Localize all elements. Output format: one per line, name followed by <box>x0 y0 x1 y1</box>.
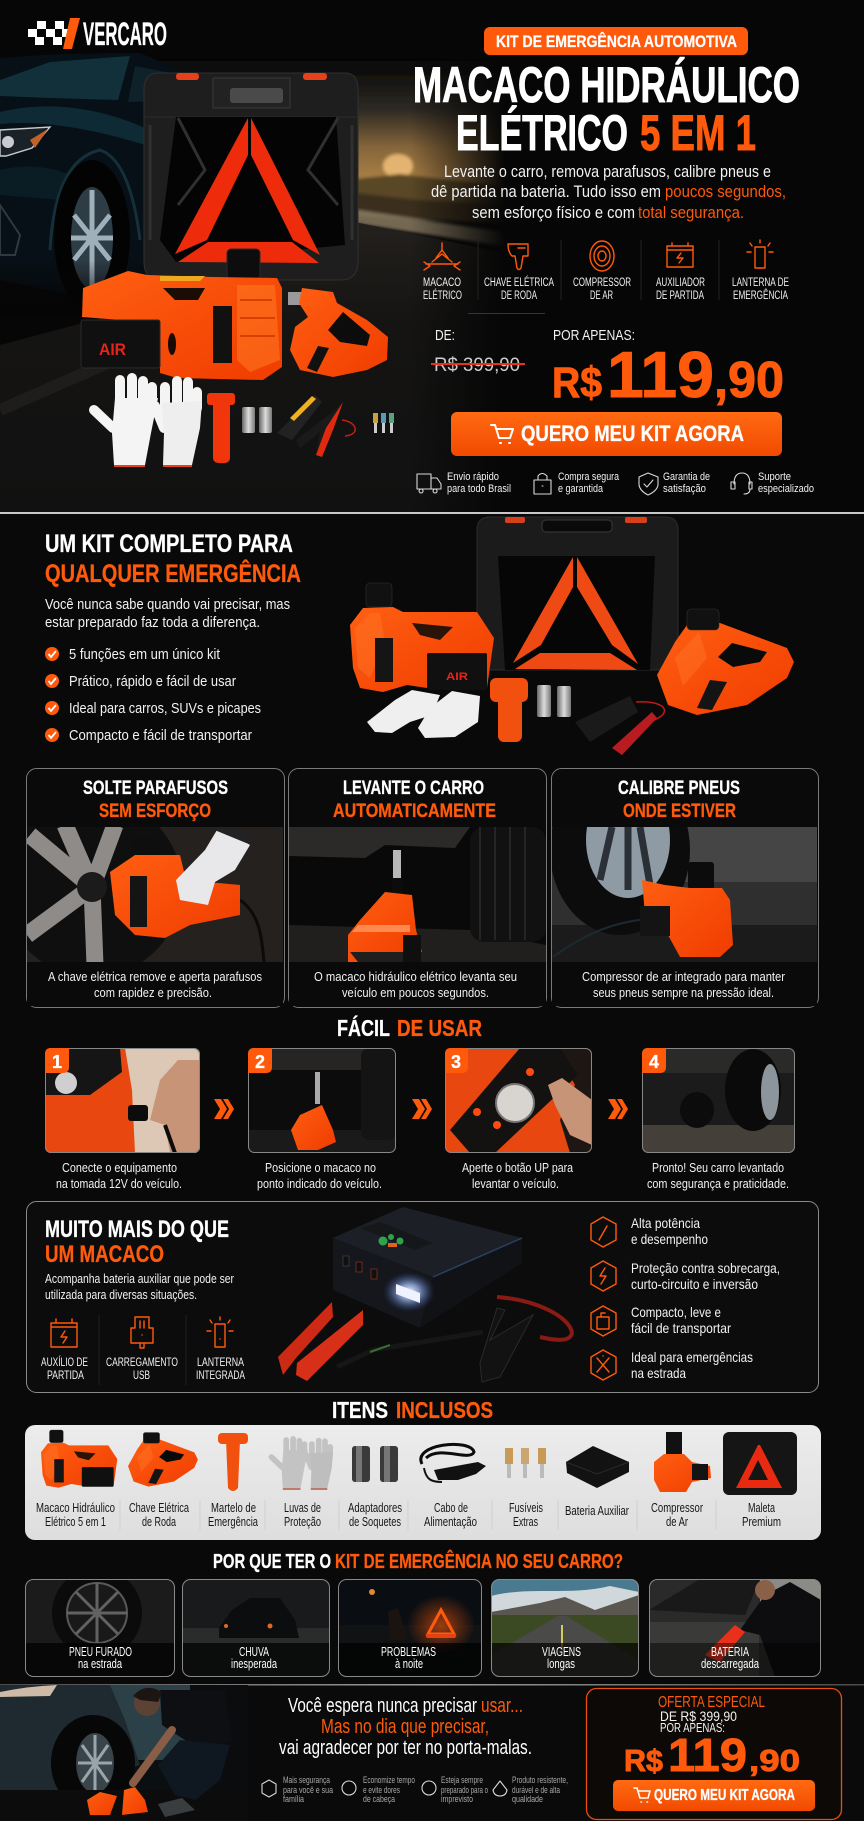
label: chave elétrica: CHAVE ELÉTRICA <box>484 276 554 289</box>
kit description: Você nunca sabe quando vai precisar, mas <box>45 597 290 613</box>
text: estrada <box>631 1349 753 1381</box>
kit jack <box>350 583 494 692</box>
section heading: por que <box>213 1549 623 1573</box>
label: auxiliador <box>656 277 705 302</box>
label: usb: USB <box>133 1370 150 1382</box>
label: partida: PARTIDA <box>47 1370 84 1382</box>
card title: SOLTE PARAFUSOS <box>83 778 228 799</box>
icon: lock <box>534 474 551 494</box>
badge <box>484 27 748 55</box>
price block <box>431 327 784 411</box>
hero panel <box>0 53 498 510</box>
step badge <box>642 1048 666 1073</box>
card photo <box>289 827 546 962</box>
label: macaco elétrico: ELÉTRICO <box>423 289 462 302</box>
reason card: bateria: descarregada <box>701 1657 759 1671</box>
step badge: 2 <box>255 1052 265 1072</box>
icon: proteção <box>591 1261 616 1291</box>
text: compra <box>558 471 620 495</box>
label: lanterna <box>196 1357 245 1382</box>
item: adaptadores: Adaptadores <box>348 1501 402 1515</box>
label: lanterna <box>732 277 789 302</box>
text: compra: Compra segura <box>558 471 620 483</box>
footer message: Mas no dia que precisar, <box>321 1716 489 1738</box>
section heading: por que: POR QUE TER O <box>213 1551 331 1573</box>
item: adaptadores: de Soquetes <box>349 1515 401 1529</box>
text: compacto <box>631 1304 731 1336</box>
step 1 <box>45 1048 200 1191</box>
icon: headset <box>731 473 752 494</box>
text: preparado: preparado para o <box>441 1785 488 1796</box>
card title <box>333 778 496 822</box>
item: martelo: Martelo de <box>211 1501 256 1515</box>
arrow <box>214 1099 234 1119</box>
footer benefits <box>262 1775 568 1805</box>
text: tempo: e evite dores <box>363 1785 400 1796</box>
offer box: OFERTA ESPECIAL <box>658 1694 765 1711</box>
step badge <box>248 1048 272 1073</box>
item: compressor: Compressor <box>651 1501 703 1515</box>
hero carrying case <box>144 73 358 280</box>
section heading: kit completo: UM KIT COMPLETO PARA <box>45 530 293 558</box>
item: chave: Chave Elétrica <box>129 1501 189 1515</box>
card caption <box>48 969 262 1000</box>
reason card: viagens: VIAGENS <box>542 1645 581 1659</box>
step caption: Posicione o macaco no <box>265 1160 376 1175</box>
text: suporte: Suporte <box>758 471 791 483</box>
item: maleta <box>723 1432 797 1529</box>
card photo <box>552 827 817 962</box>
hero clamps <box>277 395 355 457</box>
card caption <box>314 969 517 1000</box>
footer message: vai agradecer por ter no porta-malas. <box>279 1737 532 1759</box>
hero description: sem esforço físico e com <box>472 204 635 222</box>
item: maleta: Maleta <box>748 1501 775 1515</box>
label: compressor: DE AR <box>590 290 613 302</box>
section heading: kit completo: QUALQUER EMERGÊNCIA <box>45 558 301 588</box>
step photo <box>45 1048 200 1153</box>
reason card: problemas: PROBLEMAS <box>381 1645 436 1659</box>
section heading: kit completo <box>45 530 301 588</box>
step caption <box>647 1160 789 1191</box>
hero gloves <box>94 378 202 466</box>
reason card: chuva: inesperada <box>231 1657 277 1671</box>
hero description: total segurança. <box>638 204 744 222</box>
footer band <box>0 1684 864 1821</box>
text: tempo: Economize tempo <box>363 1775 415 1786</box>
label: lanterna: LANTERNA <box>197 1357 244 1369</box>
section heading: itens inclusos: INCLUSOS <box>396 1397 493 1423</box>
section heading: itens inclusos <box>332 1397 493 1423</box>
text: segurança: família <box>283 1794 305 1805</box>
icon: usb <box>131 1317 153 1348</box>
card caption: Compressor de ar integrado para manter <box>582 969 786 984</box>
reason card: viagens: longas <box>547 1657 575 1671</box>
text: envio: Envio rápido <box>447 471 499 483</box>
kit description <box>45 597 290 631</box>
panel: muito mais <box>26 1202 818 1392</box>
reason card: chuva <box>182 1579 330 1677</box>
section heading: itens inclusos: ITENS <box>332 1397 388 1423</box>
item: macaco: Macaco Hidráulico <box>36 1501 115 1515</box>
text: segurança: Mais segurança <box>283 1775 331 1786</box>
step 4 <box>642 1048 795 1191</box>
hero description <box>431 163 786 222</box>
text: segurança: para você e sua <box>283 1785 334 1796</box>
text: envio: para todo Brasil <box>447 483 511 495</box>
step badge: 4 <box>649 1052 659 1072</box>
item: bateria: Bateria Auxiliar <box>565 1504 629 1518</box>
new price <box>552 338 784 411</box>
reason card: problemas: à noite <box>395 1657 423 1671</box>
icon: compacto <box>591 1306 616 1336</box>
item: cabo <box>421 1444 486 1529</box>
footer message: Você espera nunca precisar <box>288 1695 477 1717</box>
card title: LEVANTE O CARRO <box>343 778 484 799</box>
offer box: POR APENAS: <box>660 1721 725 1735</box>
offer price: ,90 <box>749 1743 800 1778</box>
card title: AUTOMATICAMENTE <box>333 801 496 822</box>
hero hammer <box>207 393 235 463</box>
logo <box>28 16 167 52</box>
step badge: 3 <box>451 1052 461 1072</box>
text: proteção: curto-circuito e inversão <box>631 1276 758 1292</box>
hero description: poucos segundos, <box>665 183 786 201</box>
offer price: 119 <box>668 1729 747 1781</box>
text: produto: Produto resistente, <box>512 1775 568 1786</box>
card title: CALIBRE PNEUS <box>618 778 740 799</box>
text: garantia <box>663 471 710 495</box>
item: fusíveis <box>505 1448 546 1529</box>
icon: truck <box>417 474 441 493</box>
text: compacto: fácil de transportar <box>631 1320 731 1336</box>
panel description: utilizada para diversas situações. <box>45 1288 197 1302</box>
icon: estrada <box>591 1350 616 1380</box>
text: preparado <box>441 1775 488 1805</box>
label: auxiliador: AUXILIADOR <box>656 277 705 289</box>
kit description: estar preparado faz toda a diferença. <box>45 615 260 631</box>
text: produto: durável e de alta <box>512 1785 560 1796</box>
checklist: Ideal para carros, SUVs e picapes <box>69 701 261 717</box>
label: usb <box>106 1357 178 1382</box>
reason card: chuva: CHUVA <box>239 1645 269 1659</box>
new price: ,90 <box>714 351 784 408</box>
step caption: na tomada 12V do veículo. <box>56 1176 182 1191</box>
label: partida: AUXÍLIO DE <box>41 1356 88 1369</box>
price block: POR APENAS: <box>553 327 635 344</box>
checklist: Compacto e fácil de transportar <box>69 728 252 744</box>
text: potência: e desempenho <box>631 1231 708 1247</box>
step caption: Conecte o equipamento <box>62 1160 177 1175</box>
new price: R$ <box>552 359 602 407</box>
icon: battery <box>667 243 693 267</box>
label: chave elétrica <box>484 276 554 302</box>
text: produto <box>512 1775 568 1805</box>
step photo <box>445 1048 592 1153</box>
price block: DE: <box>435 327 455 344</box>
panel description: Acompanha bateria auxiliar que pode ser <box>45 1272 234 1286</box>
panel heading: UM MACACO <box>45 1241 164 1268</box>
kit gloves <box>367 690 480 738</box>
card caption: veículo em poucos segundos. <box>342 985 489 1000</box>
item: compressor <box>651 1432 711 1529</box>
offer box <box>586 1688 842 1820</box>
offer price: R$ <box>624 1743 663 1778</box>
step photo <box>248 1048 396 1153</box>
card caption: A chave elétrica remove e aperta parafusos <box>48 969 262 984</box>
CTA button: QUERO MEU KIT AGORA <box>521 421 744 446</box>
feature card: calibre pneus <box>550 765 818 1008</box>
offer price <box>624 1729 800 1781</box>
reason card: bateria <box>649 1579 821 1677</box>
section heading: fácil de usar: FÁCIL <box>337 1014 390 1041</box>
card caption: O macaco hidráulico elétrico levanta seu <box>314 969 517 984</box>
item: chave: de Roda <box>142 1515 176 1529</box>
arrow <box>412 1099 432 1119</box>
step caption: Aperte o botão UP para <box>462 1160 574 1175</box>
checklist: 5 funções em um único kit <box>69 647 220 663</box>
item: cabo: Cabo de <box>434 1501 468 1515</box>
text: compra: e garantida <box>558 483 604 495</box>
benefit list <box>591 1215 780 1381</box>
label: compressor: COMPRESSOR <box>573 277 631 289</box>
text: segurança <box>283 1775 334 1805</box>
item: adaptadores <box>348 1446 402 1529</box>
item: martelo <box>208 1433 258 1529</box>
step caption <box>257 1160 382 1191</box>
trust badges <box>417 471 814 495</box>
step caption: com segurança e praticidade. <box>647 1176 789 1191</box>
checklist <box>45 647 261 744</box>
section heading: fácil de usar: DE USAR <box>397 1015 482 1041</box>
panel heading <box>45 1216 229 1268</box>
logo: VERCARO <box>83 16 167 52</box>
item: chave <box>128 1433 198 1529</box>
icon: lanterna <box>207 1317 233 1347</box>
hero sockets <box>242 407 272 433</box>
air label: AIR <box>446 671 468 683</box>
label: auxiliador: DE PARTIDA <box>656 290 704 302</box>
text: tempo <box>363 1775 415 1805</box>
item: macaco <box>36 1430 117 1529</box>
item: maleta: Premium <box>742 1515 781 1529</box>
card caption: com rapidez e precisão. <box>94 985 212 1000</box>
item: martelo: Emergência <box>208 1515 258 1529</box>
text: suporte <box>758 471 814 495</box>
label: partida <box>41 1356 88 1382</box>
step 2 <box>248 1048 396 1191</box>
label: usb: CARREGAMENTO <box>106 1357 178 1369</box>
feature card: solte parafusos <box>2 768 284 1008</box>
icon: compressor <box>590 241 614 271</box>
icon: tempo <box>342 1781 356 1795</box>
card title: ONDE ESTIVER <box>623 801 736 822</box>
badge: KIT DE EMERGÊNCIA AUTOMOTIVA <box>496 32 737 51</box>
panel: included items <box>25 1425 821 1540</box>
reason card: pneu furado: na estrada <box>78 1657 122 1671</box>
feature card: levante o carro <box>288 768 546 1008</box>
text: suporte: especializado <box>758 483 814 495</box>
footer photo: man with jack <box>0 1685 248 1821</box>
air label: AIR <box>99 340 126 359</box>
text: potência: Alta potência <box>631 1215 700 1231</box>
item: compressor: de Ar <box>666 1515 688 1529</box>
hero background: sunset road <box>0 74 500 512</box>
hero description: dê partida na bateria. Tudo isso em <box>431 183 661 201</box>
old price: R$ 399,90 <box>434 355 520 376</box>
card photo <box>27 827 283 962</box>
text: compacto: Compacto, leve e <box>631 1304 721 1320</box>
step badge <box>445 1048 468 1073</box>
label: lanterna: LANTERNA DE <box>732 277 789 289</box>
card caption <box>582 969 786 1000</box>
text: potência <box>631 1215 708 1247</box>
checklist: Prático, rápido e fácil de usar <box>69 674 236 690</box>
card title <box>83 778 228 822</box>
text: garantia: satisfação <box>663 483 706 495</box>
item: luvas <box>271 1439 333 1529</box>
item: macaco: Elétrico 5 em 1 <box>45 1515 106 1529</box>
main title: 5 EM 1 <box>640 105 756 161</box>
step caption: levantar o veículo. <box>472 1176 559 1191</box>
kit hammer <box>490 678 528 742</box>
step badge <box>45 1048 69 1073</box>
label: macaco elétrico: MACACO <box>423 277 461 289</box>
reason card: bateria: BATERIA <box>711 1645 749 1659</box>
offer button: QUERO MEU KIT AGORA <box>654 1787 795 1804</box>
step caption: ponto indicado do veículo. <box>257 1176 382 1191</box>
hero impact wrench <box>288 288 388 377</box>
icon: cart <box>491 425 513 443</box>
item: luvas: Luvas de <box>284 1501 321 1515</box>
label: macaco elétrico <box>423 277 462 302</box>
item: fusíveis: Extras <box>513 1515 538 1529</box>
icon: jack <box>424 243 460 270</box>
icon: potência <box>591 1217 616 1247</box>
text: proteção <box>631 1260 780 1292</box>
step badge: 1 <box>52 1052 62 1072</box>
text: preparado: imprevisto <box>441 1794 473 1805</box>
reason card: viagens <box>491 1579 639 1677</box>
card title: SEM ESFORÇO <box>99 801 211 822</box>
section heading: por que: KIT DE EMERGÊNCIA NO SEU CARRO? <box>335 1549 623 1573</box>
step caption: Pronto! Seu carro levantado <box>652 1160 784 1175</box>
text: envio <box>447 471 511 495</box>
panel description <box>45 1272 234 1302</box>
text: proteção: Proteção contra sobrecarga, <box>631 1260 780 1276</box>
main title: ELÉTRICO <box>456 105 628 161</box>
icon: preparado <box>422 1781 436 1795</box>
label: chave elétrica: DE RODA <box>501 290 537 302</box>
kit sockets <box>537 685 571 717</box>
card title <box>618 778 740 822</box>
item: cabo: Alimentação <box>424 1515 477 1529</box>
text: estrada: Ideal para emergências <box>631 1349 753 1365</box>
CTA button <box>451 412 782 456</box>
text: produto: qualidade <box>512 1794 543 1805</box>
section heading: fácil de usar <box>337 1014 482 1041</box>
divider <box>0 512 864 514</box>
step 3 <box>445 1048 592 1191</box>
new price: 119 <box>607 338 714 411</box>
item: fusíveis: Fusíveis <box>509 1501 543 1515</box>
icon: segurança <box>262 1780 276 1797</box>
item: bateria <box>565 1446 629 1518</box>
main title <box>413 57 800 161</box>
text: tempo: de cabeça <box>363 1794 396 1805</box>
footer message <box>279 1695 532 1759</box>
battery photo <box>278 1207 572 1382</box>
card caption: seus pneus sempre na pressão ideal. <box>593 985 774 1000</box>
label: lanterna: INTEGRADA <box>196 1370 245 1382</box>
arrow <box>608 1099 628 1119</box>
kit case <box>477 517 678 670</box>
icon: produto <box>493 1781 507 1796</box>
feature icons row <box>423 240 789 314</box>
hero description: Levante o carro, remova parafusos, calibre pneus e <box>444 163 771 181</box>
label: lanterna: EMERGÊNCIA <box>733 289 788 302</box>
icon: partida <box>51 1319 77 1347</box>
kit product photo <box>350 517 794 755</box>
text: garantia: Garantia de <box>663 471 710 483</box>
reason card: pneu furado: PNEU FURADO <box>69 1645 132 1659</box>
text: preparado: Esteja sempre <box>441 1775 483 1786</box>
step caption <box>56 1160 182 1191</box>
hero jack <box>81 249 282 380</box>
icon: wrench <box>508 244 528 270</box>
reason card: problemas <box>338 1579 482 1677</box>
label: compressor <box>573 277 631 302</box>
kit clamps <box>575 696 664 755</box>
hero fuses <box>373 413 394 433</box>
icon: shield <box>639 473 658 495</box>
offer box: DE R$ 399,90 <box>660 1708 737 1724</box>
icon: lantern <box>747 240 773 268</box>
kit wrench <box>657 609 794 715</box>
footer message: usar... <box>481 1695 523 1717</box>
hero car <box>0 53 185 287</box>
item: luvas: Proteção <box>284 1515 321 1529</box>
reason card: pneu furado <box>25 1579 175 1677</box>
text: estrada: na estrada <box>631 1365 686 1381</box>
step caption <box>462 1160 574 1191</box>
step photo <box>642 1048 795 1153</box>
panel heading: MUITO MAIS DO QUE <box>45 1216 229 1243</box>
offer button <box>613 1780 815 1811</box>
